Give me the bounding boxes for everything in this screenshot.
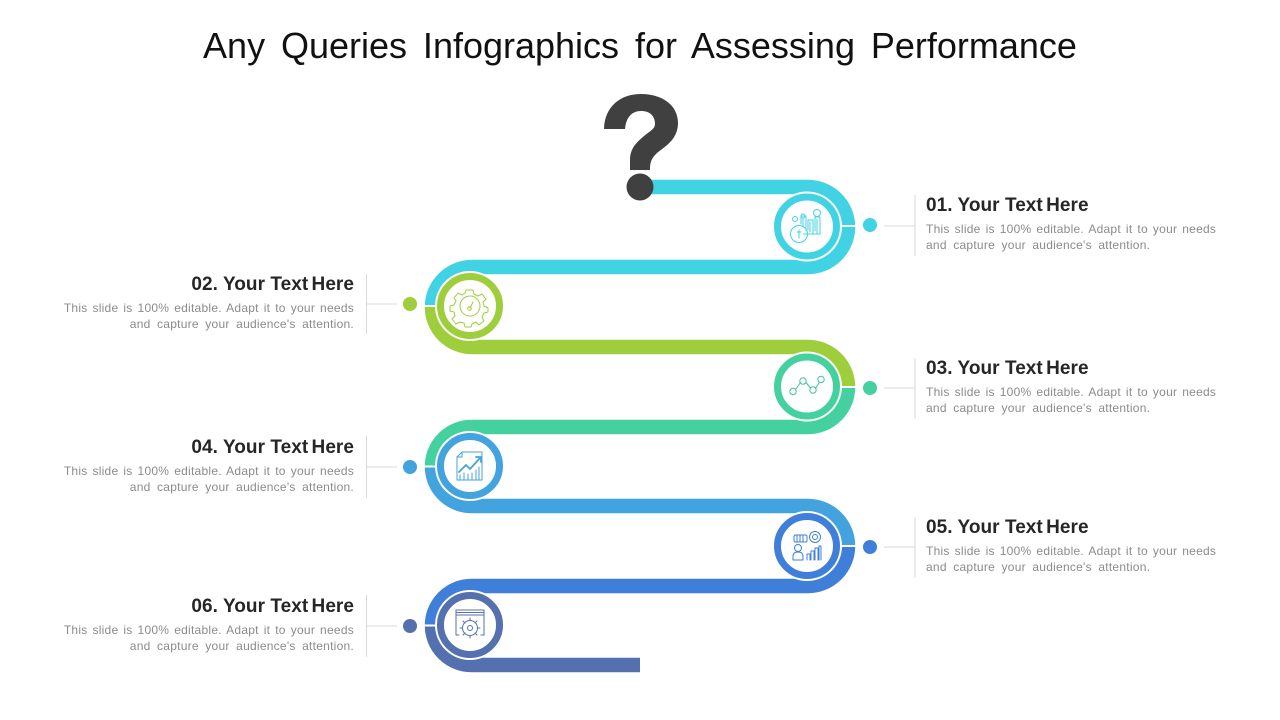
dot 04 [403, 460, 417, 474]
track segment 1 [432, 187, 848, 307]
icon: chart with dollar coin [790, 210, 820, 242]
track segment 5 [432, 546, 848, 626]
body 06: This slide is 100% editable. Adapt it to your needs [64, 623, 354, 637]
step 02 [64, 271, 505, 341]
heading 02: 02. Your Text Here [191, 274, 354, 295]
track segment 2 [432, 307, 848, 387]
body 02: and capture your audience's attention. [130, 317, 354, 331]
heading 03: 03. Your Text Here [926, 358, 1089, 379]
body 04 [64, 464, 354, 494]
connector 02 [366, 274, 397, 334]
body 03: This slide is 100% editable. Adapt it to your needs [926, 385, 1216, 399]
dot 03 [863, 381, 877, 395]
connector 03 [884, 358, 915, 419]
dot 02 [403, 297, 417, 311]
connector 05 [884, 517, 915, 578]
dot 06 [403, 619, 417, 633]
body 01: This slide is 100% editable. Adapt it to your needs [926, 222, 1216, 236]
heading 05: 05. Your Text Here [926, 517, 1089, 538]
heading 04: 04. Your Text Here [191, 437, 354, 458]
icon: question mark [604, 94, 678, 200]
body 04: and capture your audience's attention. [130, 480, 354, 494]
body 06 [64, 623, 354, 653]
node ring 05 [772, 511, 856, 581]
dot 01 [863, 218, 877, 232]
step 03 [772, 352, 1216, 422]
step 06 [64, 590, 505, 660]
node ring 04 [424, 431, 505, 501]
node ring 03 [772, 352, 856, 422]
track segment 3 [432, 387, 848, 466]
node ring 01 [772, 192, 856, 262]
body 06: and capture your audience's attention. [130, 639, 354, 653]
track segment 6 [432, 626, 640, 665]
track segment 4 [432, 466, 848, 546]
body 04: This slide is 100% editable. Adapt it to your needs [64, 464, 354, 478]
icon: growth report [457, 452, 482, 480]
title: Any Queries Infographics for Assessing Performance [203, 25, 1077, 66]
winding track [432, 187, 848, 665]
body 03: and capture your audience's attention. [926, 401, 1150, 415]
connector 01 [884, 195, 915, 256]
dot 05 [863, 540, 877, 554]
connector 06 [366, 595, 397, 657]
node ring 02 [424, 271, 505, 341]
connector 04 [366, 436, 397, 498]
icon: browser with gear [456, 610, 484, 638]
icon: presenter with gear and chart [793, 532, 821, 560]
body 05: This slide is 100% editable. Adapt it to your needs [926, 544, 1216, 558]
step 01 [772, 192, 1216, 262]
body 05: and capture your audience's attention. [926, 560, 1150, 574]
node ring 06 [424, 590, 505, 660]
body 01: and capture your audience's attention. [926, 238, 1150, 252]
body 02: This slide is 100% editable. Adapt it to your needs [64, 301, 354, 315]
icon: line chart [790, 376, 824, 395]
heading 06: 06. Your Text Here [191, 596, 354, 617]
step 05 [772, 511, 1216, 581]
step 04 [64, 431, 505, 501]
heading 01: 01. Your Text Here [926, 195, 1089, 216]
icon: gear with gauge [450, 290, 488, 327]
body 02 [64, 301, 354, 331]
